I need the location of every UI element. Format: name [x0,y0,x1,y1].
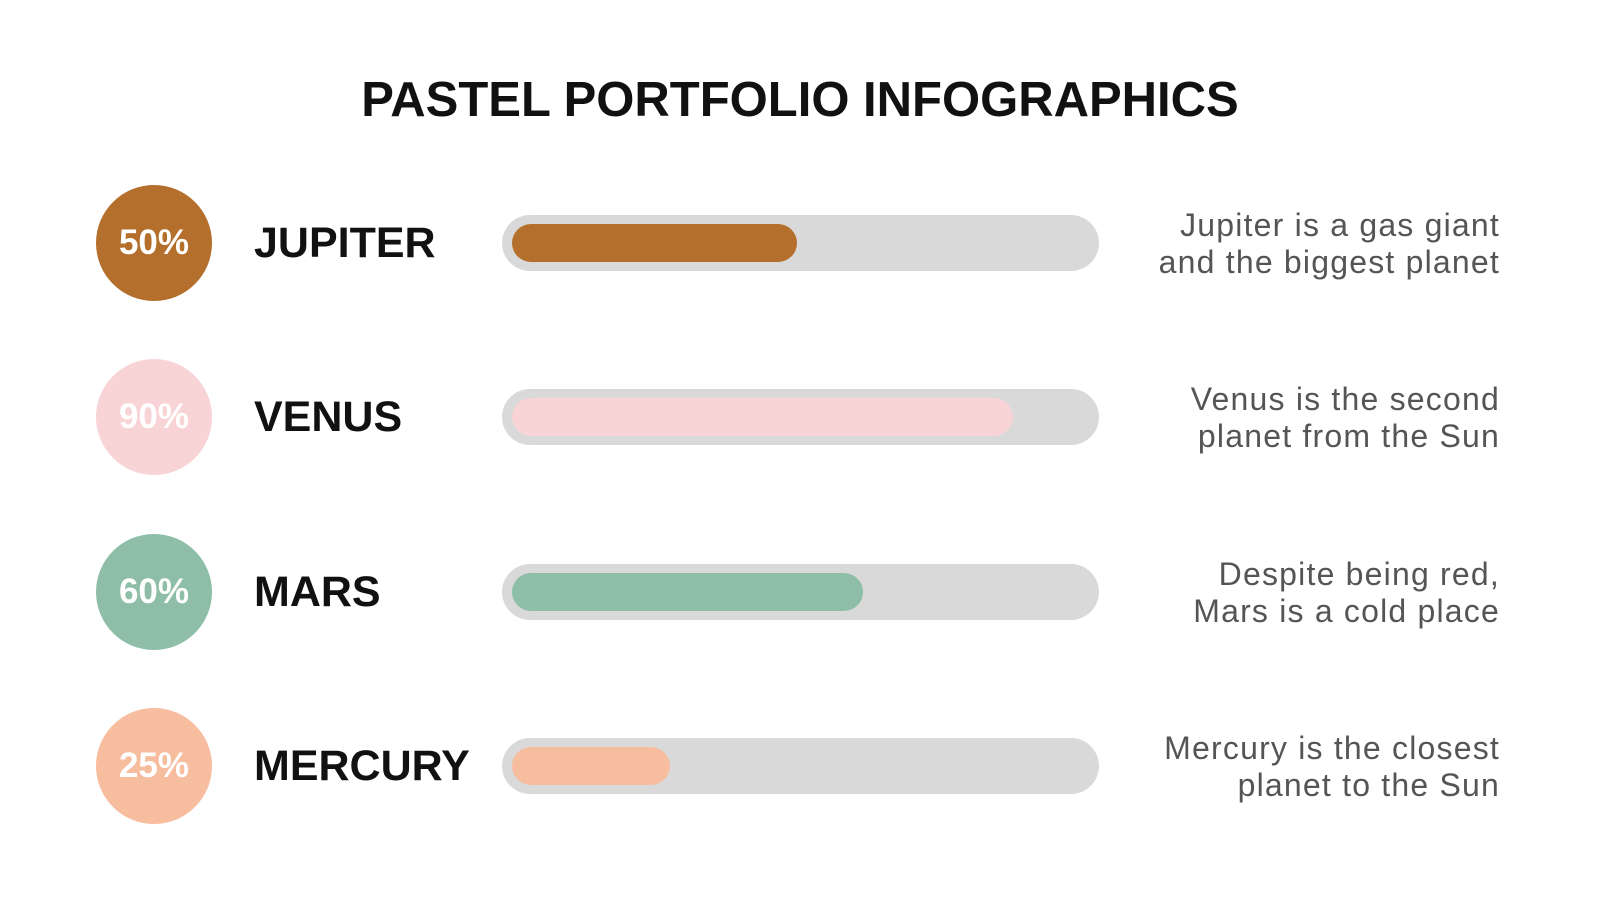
circle: 25% [96,708,212,824]
label: venus: VENUS [254,393,402,441]
circle: 90% [96,359,212,475]
label: mercury: MERCURY [254,742,470,790]
description: venus [1190,381,1500,454]
description: mercury [1164,730,1500,803]
circle: 50% [96,185,212,301]
description: mars: Mars is a cold place [1193,593,1500,629]
description: mercury: planet to the Sun [1238,767,1500,803]
title: PASTEL PORTFOLIO INFOGRAPHICS [361,73,1239,127]
circle: 25%: 25% [119,746,189,785]
description: jupiter: Jupiter is a gas giant [1180,207,1500,243]
bar: mercury [502,738,1099,794]
row: venus [96,359,402,475]
circle: 60% [96,534,212,650]
label: mars: MARS [254,568,381,616]
row: mercury [96,708,470,824]
circle: 90%: 90% [119,397,189,436]
description: mercury: Mercury is the closest [1164,730,1500,766]
description: mars: Despite being red, [1219,556,1500,592]
row: mars [96,534,381,650]
label: jupiter: JUPITER [254,219,436,267]
description: mars [1193,556,1500,629]
row: jupiter [96,185,436,301]
circle: 50%: 50% [119,223,189,262]
description: jupiter [1159,207,1500,280]
bar: mars [502,564,1099,620]
circle: 60%: 60% [119,572,189,611]
description: jupiter: and the biggest planet [1159,244,1500,280]
description: venus: Venus is the second [1191,381,1500,417]
bar: venus [502,389,1099,445]
bar: jupiter [502,215,1099,271]
description: venus: planet from the Sun [1198,418,1500,454]
